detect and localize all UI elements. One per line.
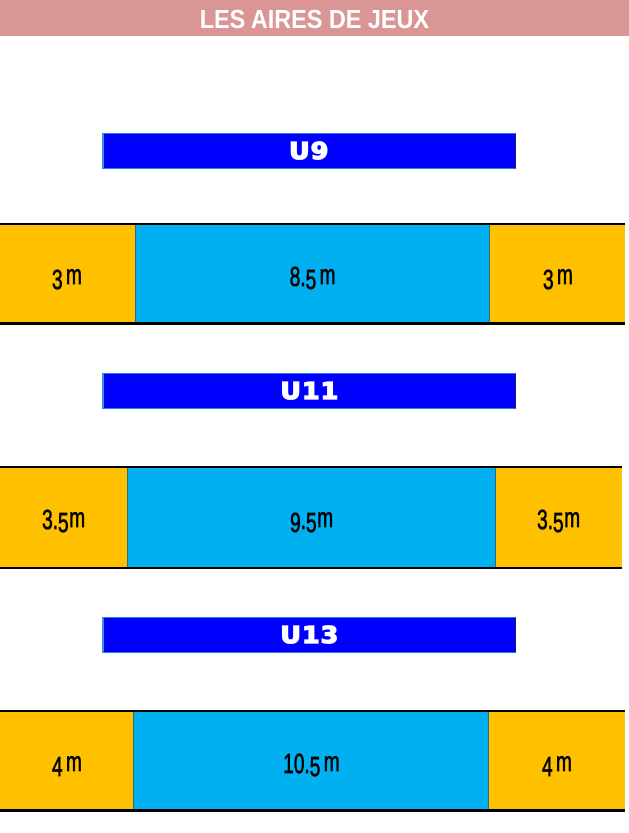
zone: right 3.5 m [495,468,622,567]
zone: right 3 m [489,225,625,322]
banner: U11 [102,373,516,409]
banner: U9: U9 [289,139,330,165]
zone: centre 10.5 m: 10.5m [283,746,339,782]
zone: right 3 m: 3m [543,259,572,295]
zone: centre 8.5 m: 8.5m [290,259,335,295]
banner: U11: U11 [280,379,339,405]
zone: left 3 m: 3m [52,259,82,295]
zone: left 3 m [0,225,135,322]
title [0,0,629,36]
zone: right 4 m: 4m [542,746,572,782]
panel: U11 play area [0,466,622,569]
zone: centre 9.5 m [127,468,495,567]
panel: U9 play area [0,223,625,325]
zone: left 4 m: 4m [52,746,81,782]
zone: centre 10.5 m [133,712,488,809]
zone: right 4 m [488,712,625,809]
zone: centre 8.5 m [135,225,489,322]
banner: U9 [102,133,516,169]
zone: left 4 m [0,712,133,809]
title: LES AIRES DE JEUX [200,4,429,34]
zone: left 3.5 m: 3.5m [42,502,85,538]
zone: right 3.5 m: 3.5m [537,502,581,538]
zone: left 3.5 m [0,468,127,567]
banner: U13: U13 [280,623,339,649]
panel: U13 play area [0,710,625,812]
banner: U13 [102,617,516,653]
zone: centre 9.5 m: 9.5m [290,502,333,538]
